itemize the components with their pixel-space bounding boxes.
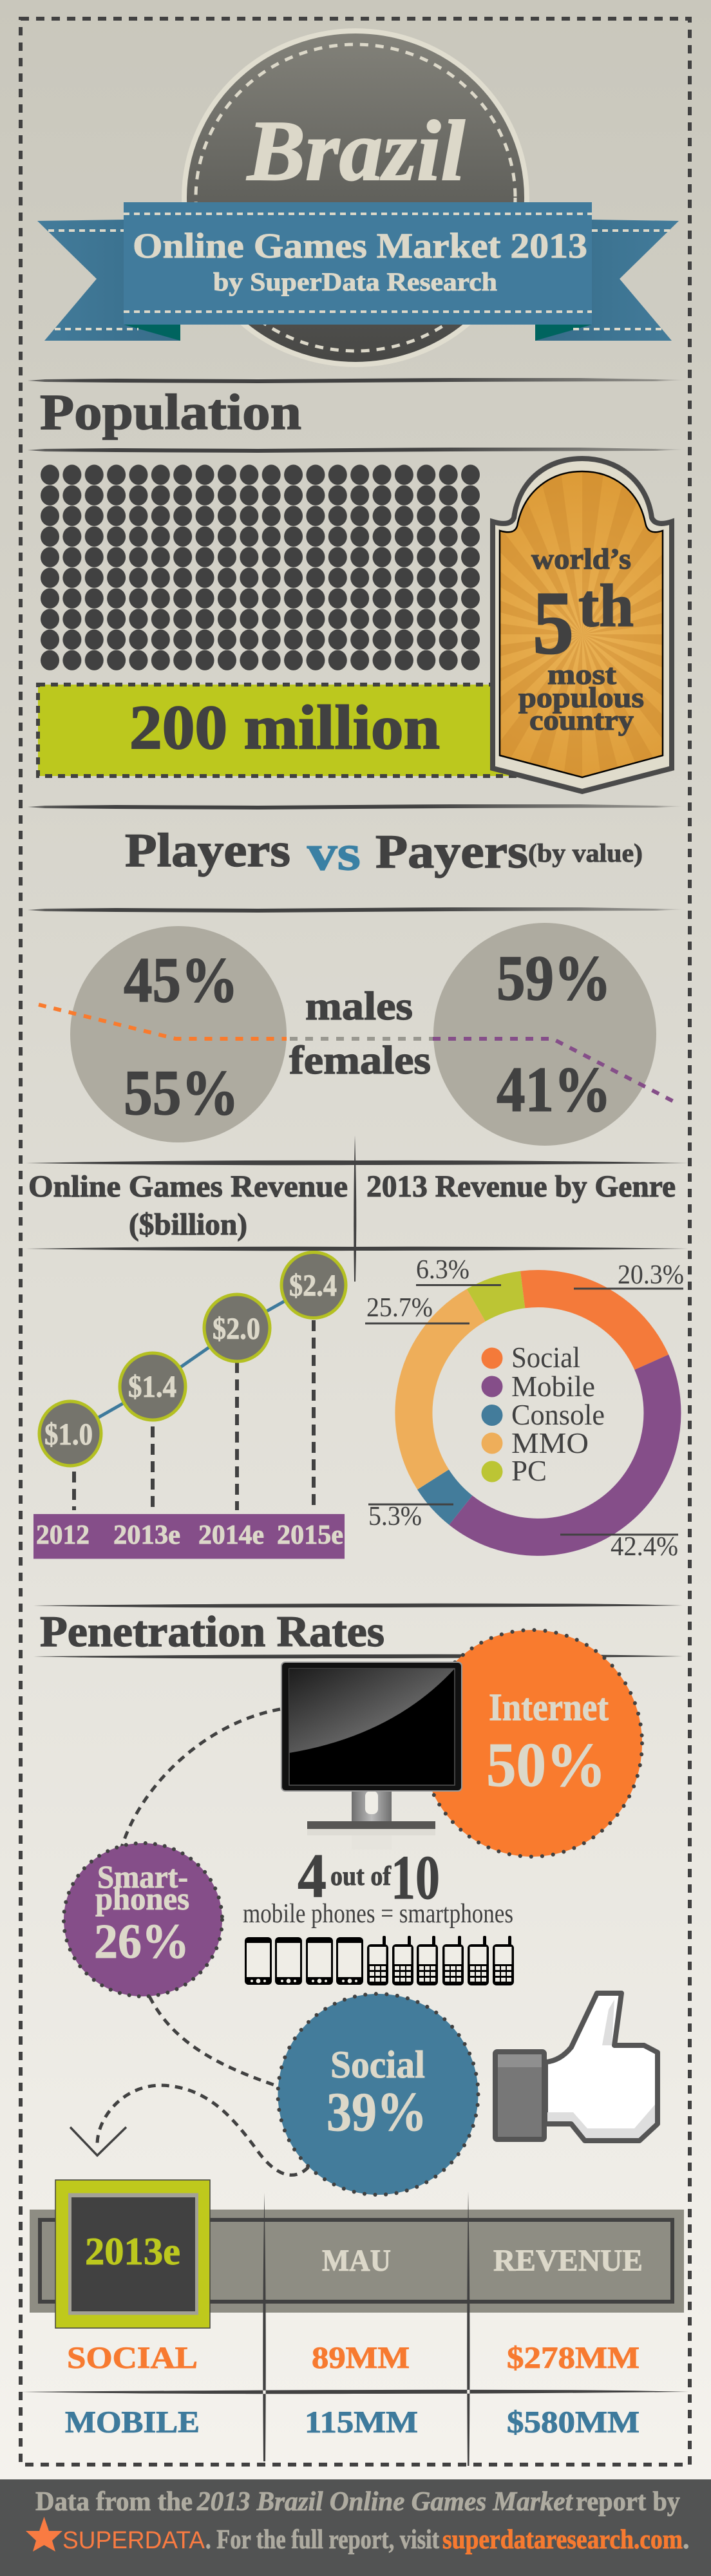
heading: 2013 Revenue by Genre: 2013 Revenue by Genre <box>366 1170 676 1204</box>
ribbon center panel <box>124 202 592 325</box>
line chart: online games revenue: 2015e <box>277 1520 343 1550</box>
caption: mobile phones = smartphones: mobile phones = smartphones <box>243 1899 513 1929</box>
dashed connector: social to table <box>97 2085 308 2175</box>
footer: superdataresearch.com <box>442 2525 683 2555</box>
players circle <box>70 926 287 1142</box>
badge: world's 5th most populous country: th <box>578 573 634 639</box>
donut chart: revenue by genre: MMO <box>511 1426 589 1459</box>
table row: mobile: MOBILE <box>65 2405 200 2439</box>
logo text: SUPERDATA: SUPERDATA <box>62 2527 205 2554</box>
line chart: online games revenue: $1.0 <box>44 1417 93 1452</box>
badge: world's 5th most populous country: 5 <box>533 573 574 673</box>
heading: Online Games Revenue: ($billion) <box>129 1208 247 1242</box>
donut chart: revenue by genre: Console <box>511 1398 605 1431</box>
gender connector dashed lines <box>39 1005 679 1104</box>
table header bar: REVENUE <box>493 2244 643 2278</box>
heading: Players vs Payers: Payers <box>375 826 528 878</box>
circle: Smartphones 26% <box>64 1843 222 1996</box>
table year tag <box>55 2180 210 2328</box>
line chart: online games revenue: 2013e <box>113 1520 180 1550</box>
label: females: females <box>289 1039 431 1083</box>
heading: Penetration Rates: Penetration Rates <box>40 1607 384 1656</box>
badge: world's 5th most populous country <box>490 456 674 795</box>
line chart: online games revenue: $2.4 <box>289 1269 337 1303</box>
line chart: online games revenue: 2014e <box>198 1520 264 1550</box>
table row: mobile <box>65 2405 640 2439</box>
line chart: online games revenue: $2.0 <box>213 1312 260 1346</box>
footer: Data from the <box>35 2487 193 2517</box>
donut chart: revenue by genre: 5.3% <box>368 1502 422 1531</box>
donut chart: revenue by genre: PC <box>511 1454 547 1487</box>
payers circle <box>433 923 656 1146</box>
footer: . <box>683 2525 689 2555</box>
icon: thumbs up <box>495 1993 658 2141</box>
circle: Smartphones 26%: phones <box>95 1880 189 1917</box>
donut chart: revenue by genre: Social <box>511 1341 580 1374</box>
ribbon tails <box>37 220 679 341</box>
donut chart: revenue by genre <box>365 1255 684 1562</box>
stat: 4 out of 10: 4 <box>298 1841 327 1911</box>
icon: star <box>26 2517 62 2552</box>
circle: Smartphones 26%: Smart- <box>97 1859 188 1895</box>
heading: Population: Population <box>40 384 301 440</box>
stat: 4 out of 10: out of <box>330 1862 392 1891</box>
label: males: males <box>305 985 413 1028</box>
heading: Online Games Revenue: Online Games Revenue <box>28 1170 348 1204</box>
table <box>21 2180 689 2466</box>
donut chart: revenue by genre: Mobile <box>511 1370 595 1403</box>
donut chart: revenue by genre: 20.3% <box>618 1260 684 1290</box>
circle: Social 39%: 39% <box>327 2081 427 2143</box>
payers circle: 59% <box>497 942 611 1014</box>
badge: world's 5th most populous country: country <box>529 705 634 736</box>
circle: Smartphones 26%: 26% <box>94 1915 189 1969</box>
icon: monitor <box>281 1662 462 1850</box>
circle: Social 39% <box>278 1994 478 2195</box>
circle: Internet 50% <box>422 1630 642 1857</box>
footer: . For the full report, visit <box>205 2525 439 2555</box>
table row: social <box>67 2341 640 2375</box>
table header bar <box>30 2210 684 2313</box>
table row: social: $278MM <box>507 2341 640 2375</box>
subtitle: Online Games Market 2013: Online Games Market 2013 <box>133 226 587 265</box>
players circle: 45% <box>124 944 238 1016</box>
table row: mobile: $580MM <box>507 2405 640 2439</box>
line chart: online games revenue <box>33 1252 346 1558</box>
badge: world's 5th most populous country: populous <box>518 682 644 714</box>
table row: mobile: 115MM <box>305 2405 418 2439</box>
population banner: 200 million: 200 million <box>129 693 440 762</box>
heading: Online Games Revenue <box>28 1170 348 1242</box>
circle: Social 39%: Social <box>330 2043 425 2086</box>
heading: Players vs Payers: vs <box>307 824 361 880</box>
population dot grid <box>41 465 480 671</box>
heading: Players vs Payers: (by value) <box>528 838 643 867</box>
payers circle: 41% <box>497 1054 611 1125</box>
stat: 4 out of 10: 10 <box>391 1843 440 1913</box>
line chart: online games revenue: $1.4 <box>128 1370 176 1404</box>
table year tag: 2013e <box>85 2230 180 2273</box>
dashed connector: smartphones to social <box>149 1996 279 2087</box>
stat: 4 out of 10 <box>298 1841 440 1913</box>
footer: 2013 Brazil Online Games Market <box>196 2487 573 2517</box>
table row: social: SOCIAL <box>67 2341 198 2375</box>
dashed connector: monitor to smartphones <box>122 1709 280 1847</box>
footer <box>0 2479 711 2576</box>
table row: social: 89MM <box>312 2341 410 2375</box>
table header bar: MAU <box>322 2244 391 2278</box>
footer: report by <box>576 2487 680 2517</box>
badge: world's 5th most populous country: world’s <box>531 543 631 575</box>
header badge: Brazil oval and ribbon <box>37 31 679 365</box>
population banner: 200 million <box>38 685 515 776</box>
line chart: online games revenue: 2012 <box>36 1520 90 1550</box>
heading: Players vs Payers <box>125 824 643 880</box>
players circle: 55% <box>124 1057 239 1128</box>
donut chart: revenue by genre: 25.7% <box>366 1293 433 1323</box>
arrow head <box>70 2127 126 2155</box>
circle: Internet 50%: 50% <box>486 1730 606 1800</box>
heading: Players vs Payers: Players <box>125 824 290 877</box>
oval emblem <box>184 31 527 365</box>
donut chart: revenue by genre: 6.3% <box>416 1255 469 1285</box>
donut chart: revenue by genre: 42.4% <box>611 1532 678 1562</box>
circle: Internet 50%: Internet <box>489 1686 609 1728</box>
badge: world's 5th most populous country: most <box>547 659 616 690</box>
subtitle: by SuperData Research: by SuperData Research <box>213 267 497 296</box>
icon row: phones <box>245 1936 514 1985</box>
title: Brazil: Brazil <box>246 103 466 198</box>
